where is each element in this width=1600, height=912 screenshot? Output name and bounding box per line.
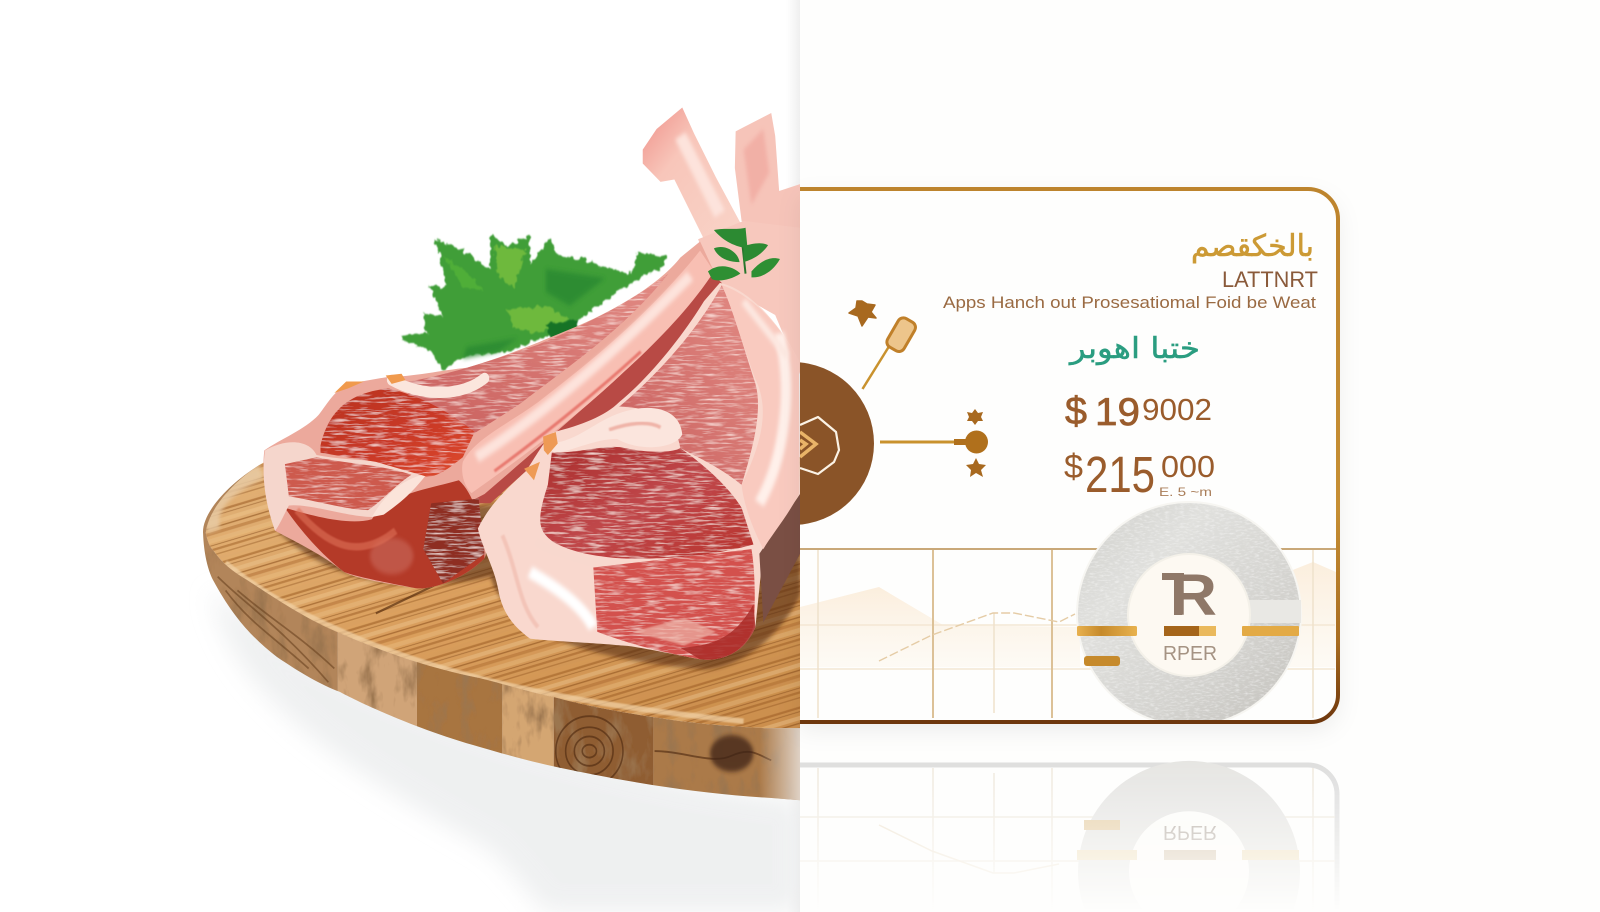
- bone joint filler: [698, 221, 800, 375]
- card reflection: [800, 761, 1337, 912]
- background: left panel: [0, 0, 800, 912]
- rib muscle: [619, 285, 758, 485]
- orange bits: [524, 432, 558, 480]
- price two: [1064, 446, 1215, 503]
- seal logo R: [1162, 573, 1216, 615]
- brown circle icon: [711, 362, 874, 525]
- lower meat: [593, 549, 755, 660]
- star large: [849, 301, 876, 326]
- eye muscle: [540, 447, 753, 559]
- hexagon outline: [800, 417, 839, 474]
- eye muscle: [320, 388, 475, 477]
- fat curl: [392, 378, 485, 392]
- price one: $: [1065, 390, 1087, 433]
- fat band: [534, 538, 753, 567]
- price two: $: [1064, 448, 1083, 486]
- tagline: Apps Hanch out Prosesatiomal Foid be Weat: [943, 293, 1316, 312]
- board side face: [190, 457, 803, 806]
- green arabic label: ختبا اهوبر: [1068, 331, 1200, 365]
- back bones: [643, 107, 800, 375]
- seal logo R: R: [1170, 563, 1217, 628]
- arrow icon: [800, 432, 816, 457]
- board top face: [206, 457, 800, 728]
- price one: 9002: [1142, 392, 1212, 427]
- fat curl: [546, 408, 682, 453]
- fat layer: [264, 442, 423, 531]
- fat base: [263, 242, 714, 588]
- peach area chart: [800, 587, 1080, 667]
- bone strap: [462, 251, 714, 493]
- card border: [800, 189, 1338, 722]
- price two: 000: [1161, 449, 1215, 484]
- front chop: [478, 283, 800, 660]
- meat shadow on board: [277, 503, 800, 669]
- price two: 215: [1085, 446, 1155, 503]
- card reflection: RPER: [1163, 821, 1217, 843]
- right fat strip: [722, 285, 799, 549]
- price two: E. 5 ~m: [1159, 485, 1212, 499]
- gold bars: [1077, 626, 1299, 666]
- seal ring: [1076, 501, 1302, 727]
- wooden board: [203, 457, 800, 800]
- seam shadow: [786, 0, 800, 912]
- card body: [800, 189, 1338, 722]
- floor reflection under board: [212, 590, 800, 912]
- arabic heading: بالخكقصم: [1191, 229, 1314, 264]
- parsley sprig: [708, 228, 780, 280]
- star small top: [967, 409, 983, 425]
- chart and seal: [800, 501, 1336, 727]
- star small bottom: [966, 458, 986, 477]
- background: right panel: [800, 0, 1600, 912]
- pin connector: [862, 316, 918, 389]
- chart grid: [800, 549, 1336, 718]
- photo: lamb chops on wooden board: [74, 107, 929, 888]
- rib muscle: [396, 274, 668, 439]
- gap between chops: [467, 264, 724, 503]
- seal label: RPER: [1163, 643, 1217, 665]
- dark cut side: [759, 494, 800, 623]
- latin sub heading: LATTNRT: [1222, 267, 1318, 292]
- dashed trend line: [879, 613, 1075, 661]
- dot connector: [880, 430, 988, 454]
- info card: [799, 187, 1340, 731]
- lower side of meat: [285, 480, 485, 588]
- orange bits: [334, 374, 405, 393]
- parsley bunch: [400, 235, 664, 370]
- price one: 19: [1095, 391, 1140, 434]
- back chop: [263, 242, 714, 588]
- fat base: [478, 283, 800, 660]
- peach area right: [1290, 562, 1336, 667]
- fat folds: [502, 535, 538, 627]
- price one: [1065, 390, 1212, 434]
